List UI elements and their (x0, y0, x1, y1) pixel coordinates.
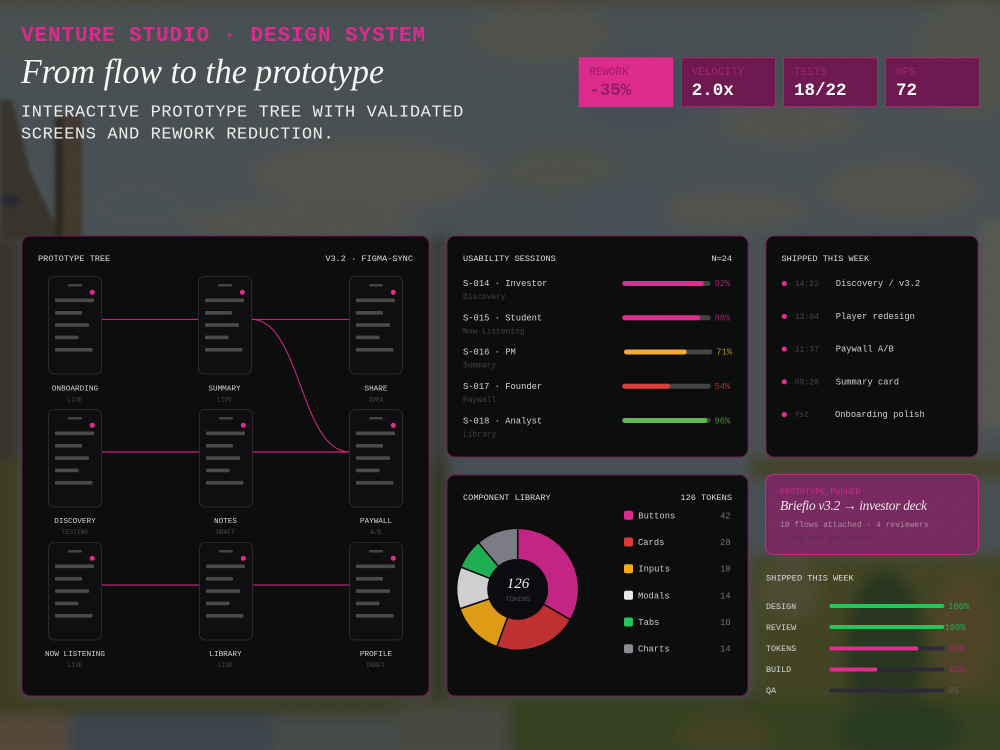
log entries: 11:37 (795, 346, 819, 355)
callout: prototype pushed: PROTOTYPE PUSHED (780, 487, 860, 497)
log entries: 09:20 (795, 378, 819, 387)
progress: design: DESIGN (766, 602, 796, 612)
session S-014: S-014 · Investor (463, 279, 547, 289)
KPI: velocity: 2.0x (692, 81, 734, 101)
log entries: Summary card (836, 377, 899, 387)
screen: onboarding (48, 276, 102, 404)
session S-016: S-016 · PM (463, 348, 516, 358)
screen: notes: NOTES (214, 518, 237, 526)
screen: now listening (45, 542, 105, 669)
log entries: Onboarding polish (835, 410, 925, 420)
screen: library (200, 542, 252, 669)
version label: V3.2 · FIGMA-SYNC (325, 254, 413, 264)
panel heading: PROTOTYPE TREE (38, 254, 110, 264)
progress: tokens: 78% (948, 644, 965, 654)
panel: usability sessions (447, 236, 748, 457)
panel: shipped this week log (766, 236, 978, 457)
screen: paywall: A/B (370, 529, 382, 536)
session S-017: Paywall (463, 396, 496, 405)
session S-015: S-015 · Student (463, 313, 542, 323)
log entries: Yst (795, 411, 809, 420)
legend (624, 511, 731, 655)
screen: discovery: TESTING (62, 529, 88, 536)
session S-014: 92% (714, 279, 731, 289)
screen: share: IDEA (369, 396, 384, 404)
log entries: Discovery / v3.2 (836, 279, 920, 289)
progress: design (766, 602, 970, 612)
progress section: shipped this week (766, 574, 970, 696)
session S-016 (463, 348, 733, 371)
KPI: tests (784, 58, 878, 106)
screen: paywall: PAYWALL (360, 518, 393, 526)
token count: 126 TOKENS (680, 493, 732, 503)
progress: QA (766, 686, 959, 696)
legend: Modals (638, 591, 670, 601)
KPI: NPS: NPS (896, 67, 916, 79)
legend: 14 (720, 645, 731, 655)
panel heading: COMPONENT LIBRARY (463, 493, 551, 503)
screen: notes (200, 410, 252, 536)
progress: review (766, 623, 966, 633)
title: From flow to the prototype (20, 52, 384, 91)
session S-016: Summary (463, 362, 496, 371)
session S-018 (463, 416, 731, 439)
donut chart: 126 (507, 576, 530, 592)
screen: profile: DRAFT (367, 662, 386, 669)
log entries: Player redesign (836, 312, 915, 322)
connectors (102, 319, 350, 585)
panel heading: SHIPPED THIS WEEK (782, 254, 870, 264)
session S-015: Now Listening (463, 327, 525, 336)
log entries: 14:22 (795, 280, 819, 289)
session S-018: 96% (714, 416, 731, 426)
legend: 18 (720, 565, 731, 575)
log entries: 13:04 (795, 313, 819, 322)
eyebrow heading: VENTURE STUDIO · DESIGN SYSTEM (21, 25, 426, 48)
session S-015 (463, 313, 731, 336)
legend: Inputs (638, 565, 670, 575)
screen: library: LIBRARY (209, 651, 242, 659)
KPI: tests: 18/22 (794, 81, 847, 101)
KPI: NPS: 72 (896, 81, 917, 101)
session S-017: S-017 · Founder (463, 382, 542, 392)
donut chart (457, 528, 579, 650)
subtitle: INTERACTIVE PROTOTYPE TREE WITH VALIDATED (21, 104, 464, 122)
screen: summary (198, 276, 252, 404)
KPI: rework: REWORK (589, 67, 629, 79)
subtitle (21, 104, 464, 144)
callout: prototype pushed (766, 474, 978, 554)
progress: build: BUILD (766, 665, 791, 675)
progress: QA: 0% (948, 686, 959, 696)
KPI: velocity (682, 58, 776, 106)
session S-015: 88% (714, 313, 731, 323)
screen: discovery: DISCOVERY (54, 518, 96, 526)
screen: now listening: NOW LISTENING (45, 651, 105, 659)
progress: review: REVIEW (766, 623, 797, 633)
panel: prototype tree (22, 236, 429, 696)
progress: tokens (766, 644, 965, 654)
screen: notes: DRAFT (216, 529, 235, 536)
progress: tokens: TOKENS (766, 644, 796, 654)
screen: profile: PROFILE (360, 651, 393, 659)
screen: discovery (48, 410, 102, 536)
session S-018: Library (463, 430, 496, 439)
KPI: rework: -35% (589, 81, 632, 101)
progress: build (766, 665, 965, 675)
legend: 28 (720, 538, 731, 548)
KPI: tests: TESTS (794, 67, 827, 79)
screen: onboarding: LIVE (68, 396, 83, 404)
KPI: NPS (886, 58, 980, 106)
legend: Charts (638, 645, 670, 655)
screen: profile (350, 542, 402, 669)
callout: prototype pushed: Briefio v3.2 → investor deck (780, 498, 928, 513)
screen: library: LIVE (218, 662, 233, 669)
screen: paywall (350, 410, 402, 536)
KPI: velocity: VELOCITY (692, 67, 745, 79)
subtitle: SCREENS AND REWORK REDUCTION. (21, 126, 334, 144)
sample size: N=24 (711, 254, 732, 264)
legend: 14 (720, 591, 731, 601)
legend: Buttons (638, 511, 675, 521)
callout: prototype pushed: Flows run available (780, 535, 871, 544)
screen: share (350, 276, 402, 404)
progress: design: 100% (948, 602, 970, 612)
screen: share: SHARE (364, 386, 388, 394)
legend: Cards (638, 538, 664, 548)
log entries: Paywall A/B (836, 345, 894, 355)
session S-016: 71% (716, 348, 733, 358)
legend: Tabs (638, 618, 659, 628)
legend: 10 (720, 618, 731, 628)
screen: summary: SUMMARY (208, 386, 241, 394)
session S-014: Discovery (463, 293, 506, 302)
progress: build: 42% (948, 665, 965, 675)
panel heading: USABILITY SESSIONS (463, 254, 556, 264)
session S-017: 54% (714, 382, 731, 392)
screen: onboarding: ONBOARDING (52, 386, 98, 394)
log entries (782, 279, 925, 420)
session S-014 (463, 279, 731, 302)
panel: component library (447, 475, 748, 696)
progress: review: 100% (944, 623, 966, 633)
legend: 42 (720, 511, 731, 521)
section heading: SHIPPED THIS WEEK (766, 574, 855, 584)
KPI: rework (579, 57, 673, 107)
session S-018: S-018 · Analyst (463, 416, 542, 426)
screen: now listening: LIVE (68, 662, 83, 669)
callout: prototype pushed: 18 flows attached · 4 reviewers (780, 521, 929, 530)
donut chart: TOKENS (506, 596, 530, 604)
progress: QA: QA (766, 686, 777, 696)
screen: summary: LIVE (217, 396, 232, 404)
session S-017 (463, 382, 731, 405)
